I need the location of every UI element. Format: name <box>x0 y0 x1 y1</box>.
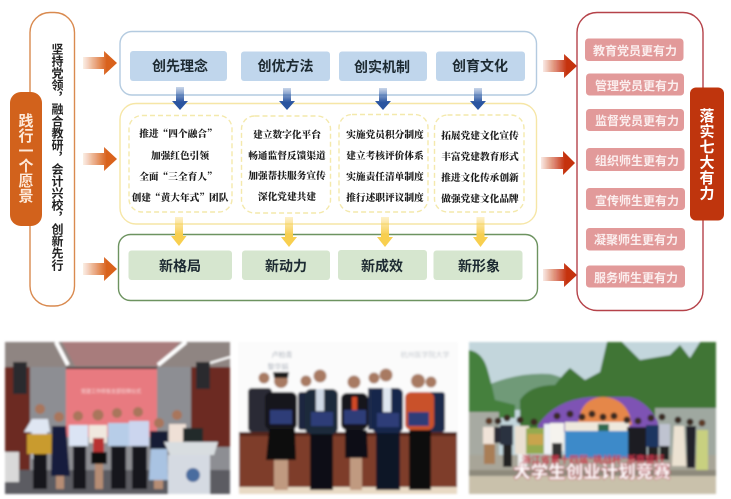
box: 创实机制 <box>339 52 427 81</box>
list: column one: 加强红色引领 <box>151 148 210 162</box>
badge: practice one vision: 景 <box>18 188 34 205</box>
tag: 凝聚师生更有力 <box>586 228 685 250</box>
mist right <box>655 408 716 468</box>
badge: practice one vision: 践 <box>18 112 34 130</box>
box: 新动力: 新动力 <box>265 258 307 274</box>
badge: implement seven strengths: 大 <box>699 154 715 172</box>
event slogan: 浙江省第十四届“挑战杯”浙商银行 <box>522 454 665 466</box>
list: column one: 创建“黄大年式”团队 <box>132 190 229 204</box>
box: 创优方法: 创优方法 <box>258 58 314 74</box>
box: 新格局 <box>128 250 232 280</box>
badge: practice one vision <box>10 92 42 226</box>
person 5 <box>405 374 434 490</box>
orange mascot <box>578 397 632 425</box>
person 4 <box>89 410 107 489</box>
panel: four creations <box>120 32 536 95</box>
panel: outcomes <box>118 234 538 300</box>
list: column three: 实施责任清单制度 <box>346 169 424 183</box>
person 1 <box>24 404 50 489</box>
crowd <box>483 410 708 470</box>
photo: certificate group: 黎华娟 <box>268 362 288 371</box>
panel: measures <box>120 104 536 224</box>
badge: practice one vision: 一 <box>18 143 34 160</box>
tag: 宣传师生更有力: 宣传师生更有力 <box>595 193 679 208</box>
box: 新形象: 新形象 <box>458 258 500 274</box>
arrow: blue down 3 <box>375 88 391 110</box>
person 4 <box>372 368 403 490</box>
list: column four: 丰富党建教育形式 <box>441 149 519 163</box>
tag: 服务师生更有力: 服务师生更有力 <box>594 270 678 285</box>
list: column three <box>339 114 428 212</box>
badge: practice one vision: 行 <box>18 128 34 145</box>
list: column one <box>129 116 232 212</box>
event slogan: 大学生创业计划竞赛 <box>513 462 671 482</box>
list: column two: 畅通监督反馈渠道 <box>248 148 326 162</box>
list: column one: 推进“四个融合” <box>139 126 217 140</box>
tag: 教育党员更有力 <box>585 38 684 61</box>
box: 新成效: 新成效 <box>361 258 403 274</box>
person 1 <box>265 372 297 490</box>
list: column three: 推行述职评议制度 <box>346 190 424 204</box>
badge: practice one vision: 愿 <box>18 173 34 190</box>
photo: certificate group: 杭州医学院大学 <box>400 350 450 359</box>
list: column four: 做强党建文化品牌 <box>441 191 519 205</box>
tag: 管理党员更有力: 管理党员更有力 <box>595 78 679 93</box>
box: 新动力 <box>242 250 330 280</box>
badge: implement seven strengths <box>690 88 724 220</box>
list: column four: 拓展党建文化宣传 <box>441 128 519 142</box>
arrow: yellow down 3 <box>377 217 393 247</box>
award plaque <box>27 434 57 454</box>
badge: implement seven strengths: 有 <box>699 170 715 187</box>
box: 创优方法 <box>241 52 330 81</box>
box: 创实机制: 创实机制 <box>354 59 410 75</box>
list: column two: 建立数字化平台 <box>253 127 322 141</box>
list: column two: 深化党建共建 <box>258 189 316 203</box>
badge: implement seven strengths: 落 <box>699 108 715 125</box>
box: 创先理念: 创先理念 <box>152 58 208 74</box>
arrow: bottom panel to right <box>543 263 577 287</box>
box: 创育文化: 创育文化 <box>452 58 508 74</box>
person 5 <box>108 408 129 489</box>
box: 新形象 <box>434 250 522 280</box>
list: column three: 实施党员积分制度 <box>346 127 424 141</box>
badge: practice one vision: 个 <box>18 158 34 175</box>
photo: certificate group <box>238 342 458 494</box>
diagram: vision to strengths framework <box>10 12 724 310</box>
arrow: left to middle panel <box>83 147 117 171</box>
ground <box>469 455 716 477</box>
person 8 <box>169 410 186 444</box>
tag: 组织师生更有力: 组织师生更有力 <box>595 153 679 168</box>
tag: 监督党员更有力: 监督党员更有力 <box>595 113 679 128</box>
box: 新格局: 新格局 <box>159 258 201 274</box>
box: 创先理念 <box>130 51 227 81</box>
tag: 组织师生更有力 <box>586 148 684 171</box>
blue banner <box>565 431 628 458</box>
tag: 教育党员更有力: 教育党员更有力 <box>593 43 677 58</box>
mist left <box>469 412 499 472</box>
list: column three: 建立考核评价体系 <box>346 148 424 162</box>
list: column four: 推进文化传承创新 <box>441 170 519 184</box>
tag: 凝聚师生更有力: 凝聚师生更有力 <box>594 232 678 247</box>
tag: 宣传师生更有力 <box>586 188 685 210</box>
arrow: top panel to right <box>543 54 577 78</box>
photo: meeting room group <box>5 342 230 494</box>
tag: 服务师生更有力 <box>586 266 685 288</box>
panel: left vision pillar <box>30 12 74 306</box>
person 2 <box>305 370 338 490</box>
purple arch <box>538 397 658 432</box>
badge: implement seven strengths: 七 <box>699 139 715 156</box>
mountain <box>490 374 565 410</box>
arrow: yellow down 1 <box>171 217 186 246</box>
photo: outdoor competition group <box>469 342 716 494</box>
arrow: left to bottom panel <box>83 257 117 281</box>
left tree <box>469 350 515 418</box>
person 2 <box>51 412 70 489</box>
tag: 管理党员更有力 <box>586 74 684 96</box>
arrow: middle panel to right <box>541 151 575 175</box>
lectern <box>164 428 218 494</box>
box: 新成效 <box>338 250 427 280</box>
person 7 <box>149 418 168 489</box>
badge: implement seven strengths: 实 <box>699 122 715 140</box>
person 3 <box>69 411 88 489</box>
box: 创育文化 <box>436 52 525 81</box>
photo: meeting room group: 党建工作样板支部授牌仪式 <box>81 388 141 395</box>
vertical text: vision statement: 坚持党领，融合教研，会计兴校，创新先行 <box>50 43 64 272</box>
list: column two <box>242 116 330 213</box>
list: column two: 加强帮扶服务宣传 <box>248 168 326 182</box>
panel: right seven strengths <box>577 12 703 310</box>
person 3 <box>341 376 368 490</box>
arrow: blue down 2 <box>279 88 295 110</box>
person 6 <box>129 407 149 489</box>
tag: 监督党员更有力 <box>586 109 684 131</box>
arrow: yellow down 4 <box>473 217 488 247</box>
badge: implement seven strengths: 力 <box>699 186 715 202</box>
arrow: left to top panel <box>83 51 117 75</box>
photo: certificate group: 卢柏青 <box>272 350 292 359</box>
arrow: blue down 4 <box>470 88 486 110</box>
arrow: blue down 1 <box>172 87 188 110</box>
list: column four <box>434 115 524 212</box>
list: column one: 全面“三全育人” <box>139 169 217 183</box>
tree line <box>520 342 716 430</box>
arrow: yellow down 2 <box>281 217 297 247</box>
